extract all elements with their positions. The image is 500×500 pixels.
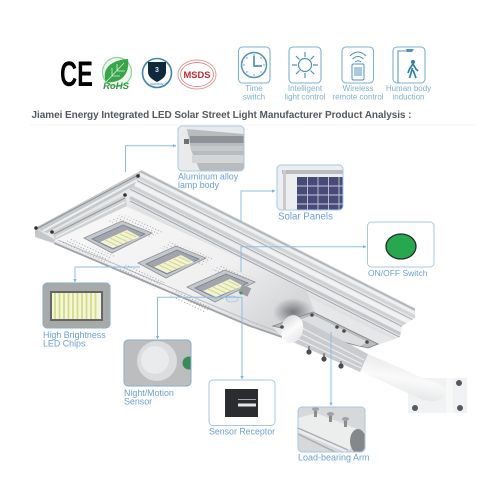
callout: load-bearing arm: Load-bearing Arm bbox=[298, 452, 370, 462]
bracket clamp bbox=[293, 320, 368, 372]
icon: human body induction bbox=[393, 47, 425, 83]
callout line: LED chips bbox=[75, 267, 140, 282]
bracket bolts bbox=[280, 313, 369, 369]
callout: high brightness LED chips: LED Chips bbox=[43, 338, 86, 348]
icon: wireless remote control bbox=[342, 47, 374, 83]
switch cluster bbox=[226, 284, 251, 302]
product: solar street light bbox=[34, 166, 467, 413]
callout: high brightness LED chips bbox=[43, 283, 110, 348]
callout: high brightness LED chips: High Brightness bbox=[43, 330, 106, 340]
LED module 3 bbox=[187, 270, 255, 302]
callout: sensor receptor: Sensor Receptor bbox=[209, 426, 275, 436]
label: wireless remote control: remote control bbox=[332, 92, 384, 102]
callout line: night sensor bbox=[158, 297, 240, 339]
label: human body induction: induction bbox=[392, 92, 425, 102]
callout: solar panels: Solar Panels bbox=[278, 212, 333, 222]
tube end bbox=[278, 313, 306, 345]
icon: RoHS badge bbox=[102, 58, 132, 92]
long rails bbox=[130, 170, 415, 340]
support arm bbox=[360, 354, 445, 401]
callout: sensor receptor bbox=[209, 380, 275, 436]
label: time switch: Time bbox=[245, 84, 263, 93]
label: intelligent light control: light control bbox=[285, 92, 326, 102]
callout: night/motion sensor bbox=[124, 340, 196, 406]
callout: aluminum alloy lamp body bbox=[178, 126, 244, 190]
perforations bbox=[60, 214, 255, 313]
callout: on/off switch bbox=[368, 222, 434, 278]
icon: MSDS badge bbox=[178, 60, 216, 89]
mounting bracket plate bbox=[273, 312, 378, 348]
label: time switch: switch bbox=[243, 92, 265, 102]
icon: warranty shield badge bbox=[142, 58, 172, 88]
label: human body induction: Human body bbox=[386, 84, 431, 93]
icon: CE mark: CE bbox=[60, 55, 93, 94]
callout: night/motion sensor: Sensor bbox=[124, 396, 152, 406]
icon: intelligent light control bbox=[289, 47, 321, 83]
lower edge rail bbox=[54, 243, 282, 337]
icon: warranty shield badge: 3 bbox=[155, 67, 159, 74]
inner short rail bbox=[52, 195, 127, 240]
wall mount plate bbox=[408, 378, 467, 413]
icon: warranty shield badge: warranty bbox=[150, 82, 164, 86]
icon: RoHS badge: RoHS bbox=[103, 81, 130, 92]
LED module 2 bbox=[138, 246, 206, 278]
infographic canvas bbox=[30, 46, 475, 462]
end face of left side bbox=[35, 228, 55, 243]
callout: aluminum alloy lamp body: Aluminum alloy bbox=[178, 172, 239, 182]
callout: on/off switch: ON/OFF Switch bbox=[368, 268, 428, 278]
callout line: load-bearing arm bbox=[330, 332, 332, 406]
label: intelligent light control: Intelligent bbox=[288, 84, 323, 93]
corner bolts bbox=[34, 174, 140, 234]
callout line: on/off switch bbox=[241, 247, 366, 272]
heading: Jiamei Energy Integrated LED Solar Street Light Manufacturer Product Analysis : bbox=[32, 110, 412, 121]
outer short rail bbox=[35, 170, 142, 233]
callout: aluminum alloy lamp body: lamp body bbox=[178, 180, 220, 190]
icon: MSDS badge: MSDS bbox=[184, 70, 210, 80]
label: wireless remote control: Wireless bbox=[343, 84, 373, 93]
callout line: sensor receptor bbox=[240, 297, 242, 379]
icon: time switch bbox=[238, 47, 270, 83]
callout: load-bearing arm bbox=[298, 407, 370, 462]
callout line: solar panels bbox=[241, 191, 275, 221]
callout: night/motion sensor: Night/Motion bbox=[124, 388, 174, 398]
callout line: aluminum bbox=[126, 146, 176, 172]
shadow above tube bbox=[273, 298, 313, 326]
inner panel bbox=[55, 206, 315, 337]
callout: solar panels bbox=[277, 165, 343, 222]
lamp body bbox=[35, 170, 415, 348]
LED module 1 bbox=[84, 221, 152, 253]
